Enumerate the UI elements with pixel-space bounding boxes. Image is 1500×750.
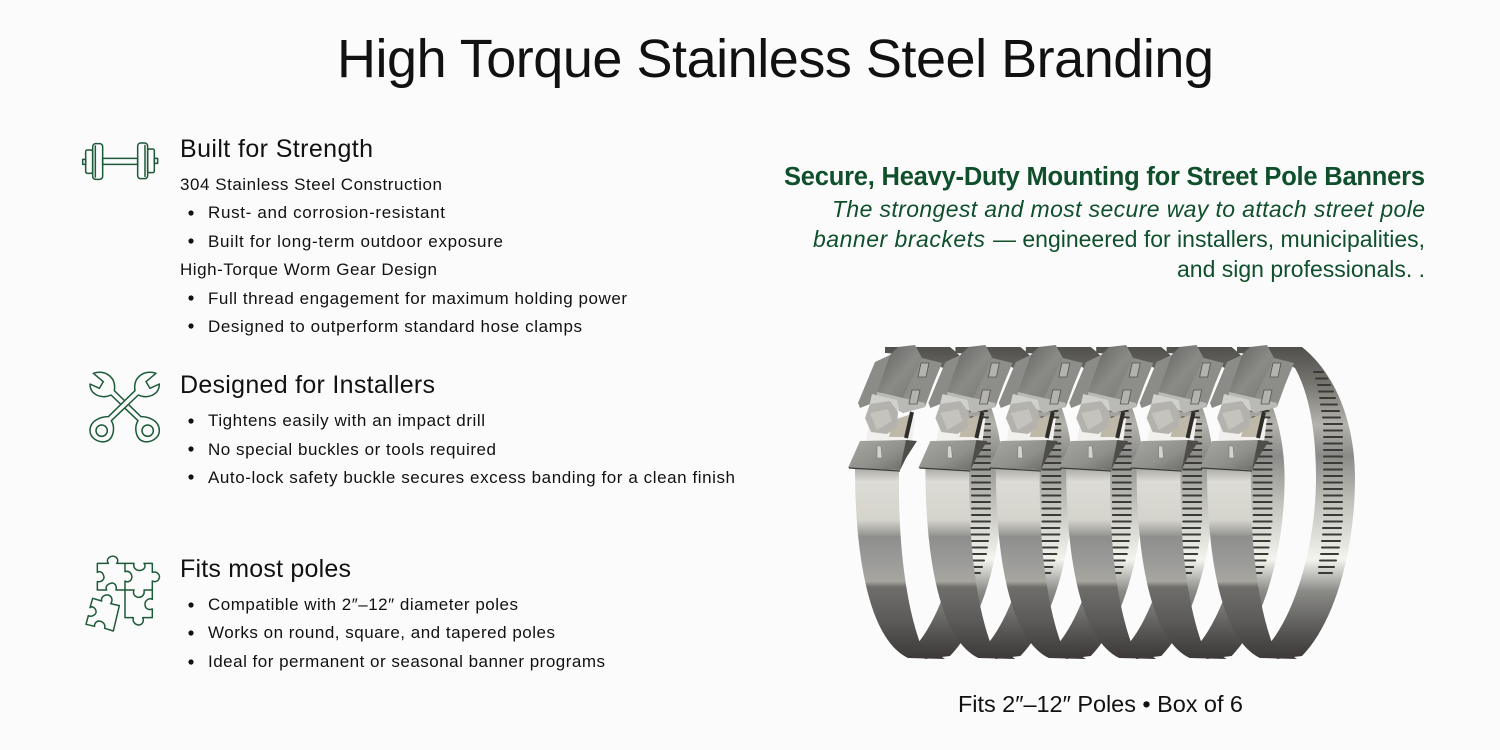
heading: fits most poles: Fits most poles	[180, 555, 351, 583]
text block: mounting description: and sign professionals. .	[1177, 256, 1425, 282]
caption: Fits 2″–12″ Poles • Box of 6	[958, 691, 1243, 717]
text block: stainless steel features	[180, 175, 627, 336]
text block: stainless steel features: Full thread engagement for maximum holding power	[208, 289, 627, 308]
text block: mounting description: The strongest and most secure way to attach street pole	[832, 196, 1425, 222]
icon: puzzle pieces	[86, 556, 159, 631]
text block: stainless steel features: Built for long-term outdoor exposure	[208, 232, 503, 251]
heading: built for strength: Built for Strength	[180, 135, 373, 163]
panel: built for strength	[83, 135, 627, 336]
panel: secure mounting headline	[784, 163, 1425, 282]
title: High Torque Stainless Steel Branding	[337, 29, 1214, 89]
list: installer benefits: Tightens easily with an impact drill	[208, 411, 485, 430]
list: installer benefits: No special buckles or tools required	[208, 440, 496, 459]
text block: mounting description	[813, 196, 1425, 282]
text block: mounting description: banner brackets	[813, 226, 986, 252]
list: pole compatibility: Compatible with 2″–12″ diameter poles	[208, 595, 518, 614]
list: installer benefits: Auto-lock safety buckle secures excess banding for a clean finish	[208, 468, 735, 487]
text block: mounting description: — engineered for installers, municipalities,	[993, 226, 1425, 252]
product image: six steel band clamps	[848, 345, 1355, 659]
subheading: secure mounting: Secure, Heavy-Duty Mounting for Street Pole Banners	[784, 163, 1425, 191]
list: pole compatibility	[188, 595, 605, 671]
text block: stainless steel features: 304 Stainless Steel Construction	[180, 175, 442, 194]
icon: crossed wrenches	[90, 372, 159, 442]
list: installer benefits	[188, 411, 735, 487]
list: pole compatibility: Works on round, square, and tapered poles	[208, 623, 555, 642]
text block: stainless steel features: Designed to outperform standard hose clamps	[208, 317, 582, 336]
panel: designed for installers	[90, 371, 735, 487]
list: pole compatibility: Ideal for permanent or seasonal banner programs	[208, 652, 605, 671]
text block: stainless steel features: Rust- and corrosion-resistant	[208, 203, 445, 222]
panel: fits most poles	[86, 555, 605, 671]
heading: designed for installers: Designed for Installers	[180, 371, 435, 399]
icon: dumbbell	[83, 143, 158, 179]
text block: stainless steel features: High-Torque Worm Gear Design	[180, 260, 437, 279]
